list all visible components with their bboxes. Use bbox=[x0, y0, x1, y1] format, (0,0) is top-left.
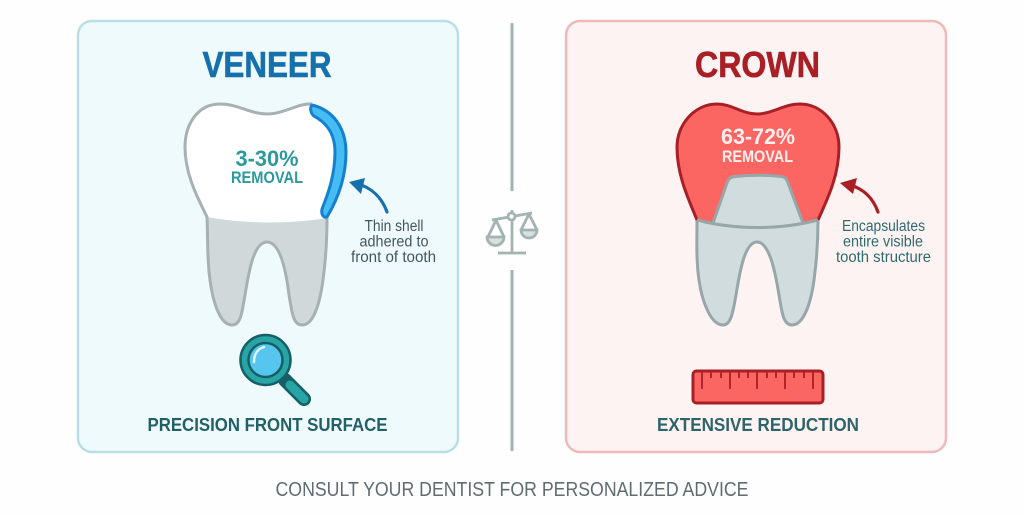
divider with scales bbox=[487, 23, 537, 451]
label: precision front surface: PRECISION FRONT SURFACE bbox=[148, 414, 388, 435]
stat: veneer removal: 3-30% bbox=[236, 146, 298, 171]
icon: crown tooth bbox=[677, 104, 839, 325]
label: extensive reduction: EXTENSIVE REDUCTION bbox=[657, 414, 859, 435]
stat: crown removal bbox=[721, 124, 795, 166]
arrow: crown bbox=[840, 178, 878, 212]
icon: magnifying glass bbox=[240, 335, 304, 399]
icon: balance scales bbox=[487, 210, 537, 253]
callout: veneer: Thin shell bbox=[364, 218, 424, 235]
panel: veneer bbox=[78, 21, 458, 452]
stat: veneer removal: REMOVAL bbox=[231, 169, 303, 187]
callout: veneer: front of tooth bbox=[351, 249, 436, 266]
stat: veneer removal bbox=[231, 146, 303, 187]
icon: veneer tooth bbox=[185, 104, 346, 325]
callout: veneer: adhered to bbox=[360, 234, 428, 250]
prepared stump bbox=[713, 175, 803, 227]
veneer shell bbox=[311, 105, 346, 217]
footer note: CONSULT YOUR DENTIST FOR PERSONALIZED ADVICE bbox=[276, 479, 748, 501]
icon: ruler bbox=[693, 371, 823, 403]
callout: crown: Encapsulates bbox=[842, 218, 925, 235]
callout: veneer bbox=[351, 218, 436, 266]
callout: crown: tooth structure bbox=[836, 249, 931, 266]
callout: crown bbox=[836, 218, 931, 266]
panel: crown bbox=[566, 21, 946, 452]
stat: crown removal: REMOVAL bbox=[722, 148, 793, 166]
stat: crown removal: 63-72% bbox=[721, 124, 795, 149]
arrow: veneer bbox=[349, 178, 387, 212]
heading: veneer: VENEER bbox=[202, 44, 332, 85]
callout: crown: entire visible bbox=[843, 234, 923, 250]
heading: crown: CROWN bbox=[695, 44, 820, 85]
